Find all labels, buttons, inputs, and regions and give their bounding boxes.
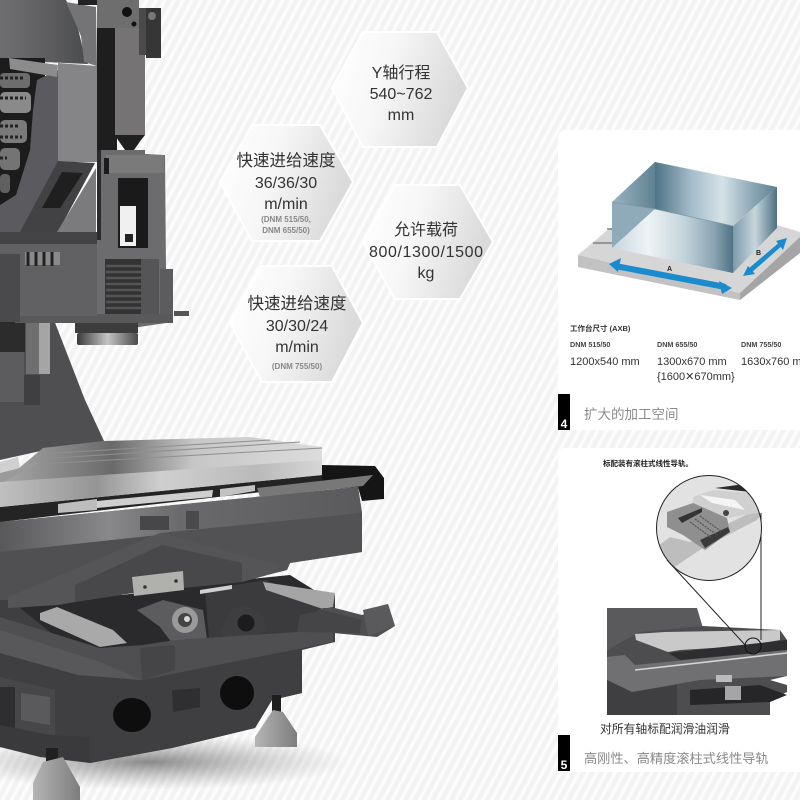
bearing block: [220, 605, 267, 645]
spindle nose: [75, 323, 138, 333]
hexagon: Y axis travel: 540~762: [370, 86, 432, 103]
hexagon: allowable load: 800/1300/1500: [369, 244, 483, 261]
head cover panels: [0, 70, 58, 232]
machine photo: [607, 608, 787, 715]
saddle: [0, 487, 362, 600]
base tray: [0, 604, 395, 680]
hexagon: rapid feed 515/655: (DNM 515/50,: [261, 215, 311, 224]
hexagon: rapid feed 755: [230, 266, 363, 382]
hexagon: rapid feed 755: (DNM 755/50): [272, 362, 322, 371]
work envelope diagram: [578, 162, 800, 300]
hexagon: rapid feed 755: 快速进给速度: [248, 294, 346, 313]
hexagon: rapid feed 515/655: [220, 125, 353, 241]
levelling feet: [46, 748, 58, 763]
table size specs: DNM 655/50: [657, 340, 697, 349]
table size specs: 1300x670 mm: [657, 356, 727, 368]
panel 5: linear guideways: [558, 448, 800, 772]
saddle rib: [8, 533, 280, 608]
small circle: [745, 638, 761, 654]
number tag 4: [558, 394, 570, 431]
hexagon: allowable load: 允许载荷: [394, 221, 458, 239]
base block: [0, 650, 302, 763]
hexagon: Y axis travel: Y轴行程: [372, 64, 430, 82]
linear rails: [40, 607, 127, 647]
table size specs: {1600✕670mm}: [657, 371, 735, 383]
way covers and carriages: [0, 475, 322, 522]
hexagon: rapid feed 755: 30/30/24: [266, 318, 328, 335]
table size specs: [570, 323, 800, 383]
column casting: [0, 320, 104, 460]
right end of X way: [322, 465, 384, 501]
panel 4: enlarged machining space: [558, 130, 800, 431]
hexagon: rapid feed 515/655: 36/36/30: [255, 175, 317, 192]
zoom lens: roller guide: [656, 475, 762, 581]
hexagon: allowable load: kg: [418, 265, 434, 282]
heading 5: 高刚性、高精度滚柱式线性导轨: [584, 750, 769, 766]
table size specs: DNM 755/50: [741, 340, 781, 349]
hexagon: allowable load: [363, 185, 493, 299]
number tag 4: 4: [561, 417, 568, 431]
hexagon: Y axis travel: [332, 32, 468, 147]
arrow B: [743, 238, 787, 276]
lubrication caption: 对所有轴标配润滑油润滑: [600, 722, 730, 736]
number tag 5: [558, 735, 570, 772]
table front face: [0, 460, 322, 507]
caption top: 标配装有滚柱式线性导轨。: [603, 458, 693, 468]
hexagon: rapid feed 755: m/min: [275, 339, 319, 356]
head lower body: [0, 232, 97, 316]
table top: [0, 437, 322, 490]
table size specs: 1200x540 mm: [570, 356, 640, 368]
lower machine backing silhouette: [0, 595, 335, 763]
zoom lens lines: [667, 513, 761, 647]
arrow A: [609, 258, 732, 294]
heading 4: 扩大的加工空间: [584, 407, 678, 422]
tool magazine: [0, 58, 45, 233]
tool magazine cover dome: [0, 0, 88, 64]
hexagon: rapid feed 515/655: DNM 655/50): [262, 226, 310, 235]
work envelope diagram: A: [667, 266, 672, 273]
number tag 5: 5: [561, 758, 568, 772]
hexagon: rapid feed 515/655: 快速进给速度: [236, 151, 336, 170]
table size specs: 工作台尺寸 (AXB): [570, 323, 631, 333]
table size specs: DNM 515/50: [570, 340, 610, 349]
hexagon: Y axis travel: mm: [388, 107, 414, 124]
floor shadow: [0, 734, 350, 790]
ball screw support: [137, 600, 208, 647]
spindle head: [97, 150, 173, 332]
hexagon: rapid feed 515/655: m/min: [264, 196, 308, 213]
work envelope diagram: B: [756, 250, 761, 257]
Z column: [97, 10, 117, 160]
machine illustration: [0, 0, 395, 800]
interior of base: [20, 575, 335, 660]
